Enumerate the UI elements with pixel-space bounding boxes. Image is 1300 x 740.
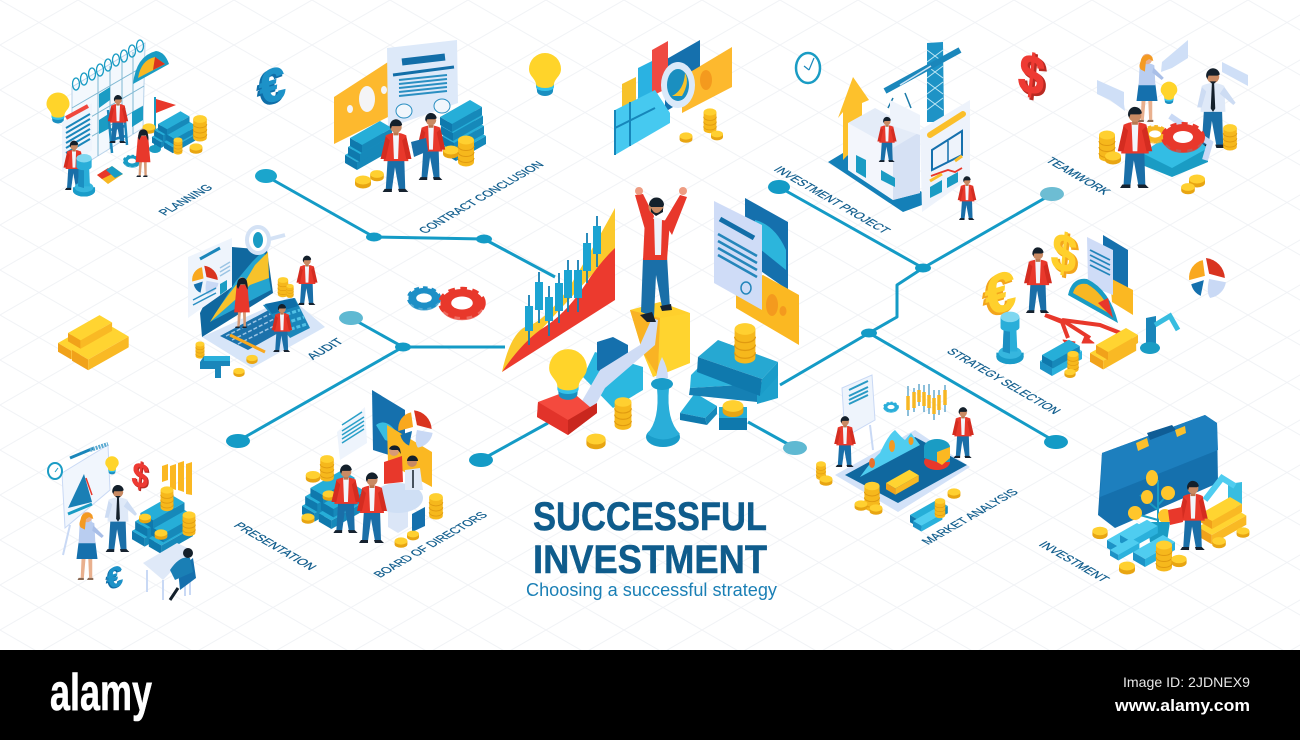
checklist paper <box>62 103 92 172</box>
gear table <box>1142 116 1210 177</box>
title: SUCCESSFUL <box>533 495 767 539</box>
ingots left <box>345 121 392 170</box>
label: market analysis: MARKET ANALYSIS <box>918 487 1022 547</box>
icon: gold bars <box>58 315 129 370</box>
gold bars <box>886 470 919 495</box>
label: teamwork: TEAMWORK <box>1042 155 1114 197</box>
icon: small bulb <box>1161 82 1177 104</box>
seated directors <box>384 445 423 490</box>
icon: yellow euro: € <box>980 260 1016 330</box>
coins <box>1099 124 1237 194</box>
hero man <box>635 187 687 322</box>
icon: euro: € <box>257 55 288 115</box>
market mountain <box>860 430 920 477</box>
crane <box>885 42 960 135</box>
website: www.alamy.com <box>1114 696 1250 715</box>
coins <box>355 136 474 188</box>
bar columns <box>622 41 668 110</box>
map panel <box>372 390 405 460</box>
chess pawn <box>646 357 680 447</box>
man in red <box>1118 107 1152 188</box>
label: strategy selection: STRATEGY SELECTION <box>943 346 1064 416</box>
handshake people <box>381 113 445 192</box>
icon: yellow dollar: $ <box>1051 224 1081 287</box>
handshake people <box>331 465 387 543</box>
icon: pie chart <box>398 410 433 448</box>
icon: gears <box>408 288 484 320</box>
icon: light bulb <box>46 92 70 123</box>
scene: presentation <box>48 444 196 600</box>
icon: 3D pie <box>924 439 950 470</box>
coins on ingots <box>723 323 755 417</box>
flip chart <box>62 444 110 555</box>
giant briefcase <box>1098 415 1218 528</box>
calculator <box>263 298 310 338</box>
magnifier <box>247 227 285 253</box>
blue box and briefcase <box>583 337 643 408</box>
desk with seated woman <box>143 543 196 600</box>
icon: small bulb <box>105 456 119 474</box>
subtitle: Choosing a successful strategy <box>526 580 777 600</box>
briefcase <box>412 507 425 532</box>
scene: teamwork <box>1097 40 1248 194</box>
icon: small dollar: $ <box>131 455 151 497</box>
woman and gear <box>124 129 150 177</box>
title <box>533 495 767 582</box>
blue bars <box>1107 520 1175 567</box>
coins <box>1092 527 1249 574</box>
document stack <box>1087 235 1133 315</box>
coins and ingots <box>196 277 294 378</box>
icon: stamp and bulb <box>537 349 597 435</box>
plan board <box>920 100 970 212</box>
building <box>848 108 920 200</box>
coins <box>586 397 631 449</box>
label: investment project: INVESTMENT PROJECT <box>770 164 894 236</box>
tablet <box>835 430 970 512</box>
gold bar chart <box>162 461 192 495</box>
folder block <box>615 90 670 155</box>
connector nodes <box>226 169 1068 467</box>
title: INVESTMENT <box>533 538 767 582</box>
robot arm <box>1205 478 1242 508</box>
man with briefcase <box>1024 247 1052 313</box>
analysis board <box>842 375 875 450</box>
upward arrow <box>575 318 658 420</box>
ingots and coins <box>302 455 365 529</box>
scene: audit <box>188 227 325 378</box>
woman with tablet <box>1136 54 1164 122</box>
scene: central hero <box>502 187 799 449</box>
gold bars <box>1198 497 1246 544</box>
label: planning: PLANNING <box>155 182 216 218</box>
icon: pie chart <box>1189 258 1226 298</box>
coins and blue bars <box>816 461 960 532</box>
people <box>234 256 318 352</box>
people <box>834 407 974 467</box>
scene: board of directors <box>302 390 443 548</box>
laptop <box>200 247 325 368</box>
man in white shirt <box>1197 68 1236 148</box>
icon: dollar: $ <box>1018 43 1049 110</box>
icon: dollar: $ <box>1016 41 1047 108</box>
label: presentation: PRESENTATION <box>230 520 320 572</box>
yellow panel <box>387 425 432 487</box>
gauge <box>1068 279 1118 323</box>
icon: top light bulb <box>529 53 561 96</box>
watering can and man <box>1168 481 1208 550</box>
calendar board <box>72 40 145 172</box>
icon: clock <box>796 53 820 83</box>
scene: chart and magnifier <box>615 40 732 155</box>
contract document <box>387 40 458 128</box>
label: board of directors: BOARD OF DIRECTORS <box>370 510 491 580</box>
candlestick chart <box>908 384 945 420</box>
icon: small dollar: $ <box>130 454 150 496</box>
flowchart connectors <box>238 176 1056 460</box>
ingots pile <box>680 340 778 430</box>
icon: small euro: € <box>105 561 123 597</box>
scene: investment project <box>828 42 976 220</box>
ingots and coins <box>132 486 195 554</box>
robot arm <box>1140 316 1178 354</box>
puzzle <box>97 166 123 184</box>
gauge <box>133 51 169 84</box>
label: contract conclusion: CONTRACT CONCLUSION <box>415 159 547 236</box>
growth chart <box>502 208 615 372</box>
rook <box>996 312 1024 364</box>
scene: strategy selection <box>980 222 1178 378</box>
banknote <box>682 47 732 113</box>
scene: market analysis <box>816 375 974 532</box>
dark panel <box>665 40 700 112</box>
icon: yellow euro: € <box>982 258 1018 328</box>
scene: planning <box>46 40 207 197</box>
gold block <box>630 302 690 377</box>
banknote <box>334 62 388 144</box>
image id: Image ID: 2JDNEX9 <box>1123 674 1250 690</box>
yellow arrow <box>838 77 869 160</box>
logo: alamy <box>50 664 152 722</box>
icon: yellow dollar: $ <box>1049 222 1079 285</box>
label: audit: AUDIT <box>303 336 347 362</box>
round table <box>373 483 423 533</box>
gold and blue bars <box>1040 328 1138 378</box>
gold coins and ingots <box>143 111 207 155</box>
icon: clock <box>48 463 62 479</box>
document <box>337 407 367 460</box>
magnifier <box>661 62 695 108</box>
money tree <box>1128 470 1175 542</box>
speech bubbles <box>1097 40 1248 111</box>
man with rook <box>64 141 95 197</box>
flag <box>149 97 176 153</box>
icon: small euro: € <box>106 560 124 596</box>
document <box>714 198 799 345</box>
presenter people <box>76 485 137 580</box>
workers <box>877 117 976 220</box>
scene: contract conclusion <box>334 40 486 192</box>
icon: euro: € <box>255 57 286 117</box>
pencil <box>230 335 265 352</box>
chart paper <box>188 238 232 318</box>
ladder and worker <box>108 95 128 153</box>
coins <box>302 493 443 548</box>
coins <box>680 108 723 143</box>
icon: gear <box>884 402 898 413</box>
footer bar <box>0 650 1300 740</box>
label: investment: INVESTMENT <box>1035 539 1113 584</box>
red arrows <box>1045 315 1134 349</box>
scene: investment <box>1092 415 1249 574</box>
ingots right <box>440 100 486 161</box>
platform <box>828 153 922 212</box>
